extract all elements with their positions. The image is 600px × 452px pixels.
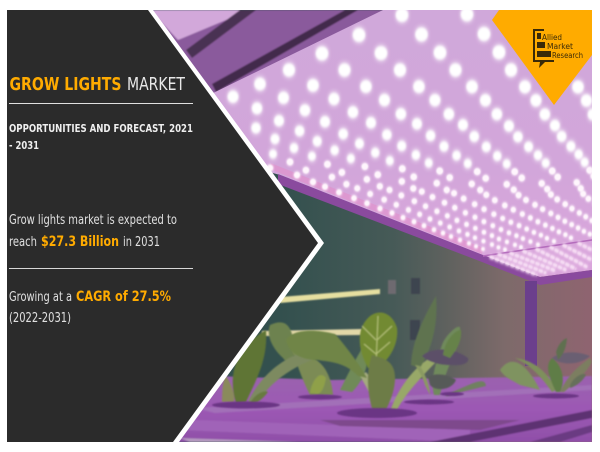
- logo badge: [492, 10, 592, 105]
- logo wordmark: [542, 34, 582, 58]
- plant: right seedling: [515, 338, 592, 392]
- panel seam: [483, 240, 592, 256]
- dark text panel with white border: [7, 10, 324, 442]
- second LED panel streaks: [490, 243, 592, 275]
- icon: logo speech-bubble bars: [533, 29, 554, 68]
- market size statement: [9, 213, 177, 250]
- market size statement: Grow lights market is expected to: [9, 213, 177, 228]
- CAGR statement: Growing at a: [9, 290, 72, 305]
- plant: main seedling: [286, 296, 468, 412]
- logo wordmark: Research: [552, 51, 583, 60]
- ceiling frame beams: [153, 10, 383, 93]
- purple support post: [525, 281, 537, 366]
- CAGR statement: (2022-2031): [9, 311, 71, 326]
- CAGR statement: CAGR of 27.5%: [76, 289, 171, 305]
- wall: [153, 10, 592, 442]
- logo wordmark: Market: [547, 42, 573, 51]
- plant: left seedling: [222, 330, 312, 404]
- LED rows near: [233, 13, 600, 164]
- market size statement: $27.3 Billion: [41, 234, 119, 250]
- seedling holders: [212, 392, 579, 418]
- market size statement: reach: [9, 235, 37, 250]
- pink glow along the panel edge: [270, 166, 483, 251]
- subtitle: [9, 124, 192, 149]
- market size statement: in 2031: [123, 235, 160, 250]
- subtitle: - 2031: [9, 139, 39, 152]
- LED rows far: [270, 162, 600, 250]
- back plants: [269, 322, 540, 396]
- title: GROW LIGHTS: [10, 74, 122, 95]
- logo wordmark: Allied: [542, 33, 562, 42]
- CAGR statement: [9, 289, 171, 326]
- wall shelf lights: [262, 278, 420, 340]
- panel frame beam: [278, 174, 592, 285]
- subtitle: OPPORTUNITIES AND FORECAST, 2021: [9, 122, 193, 135]
- hydroponic table: [170, 376, 592, 442]
- title: [10, 77, 185, 90]
- title: MARKET: [127, 74, 186, 95]
- LED light panel surface: [205, 10, 592, 277]
